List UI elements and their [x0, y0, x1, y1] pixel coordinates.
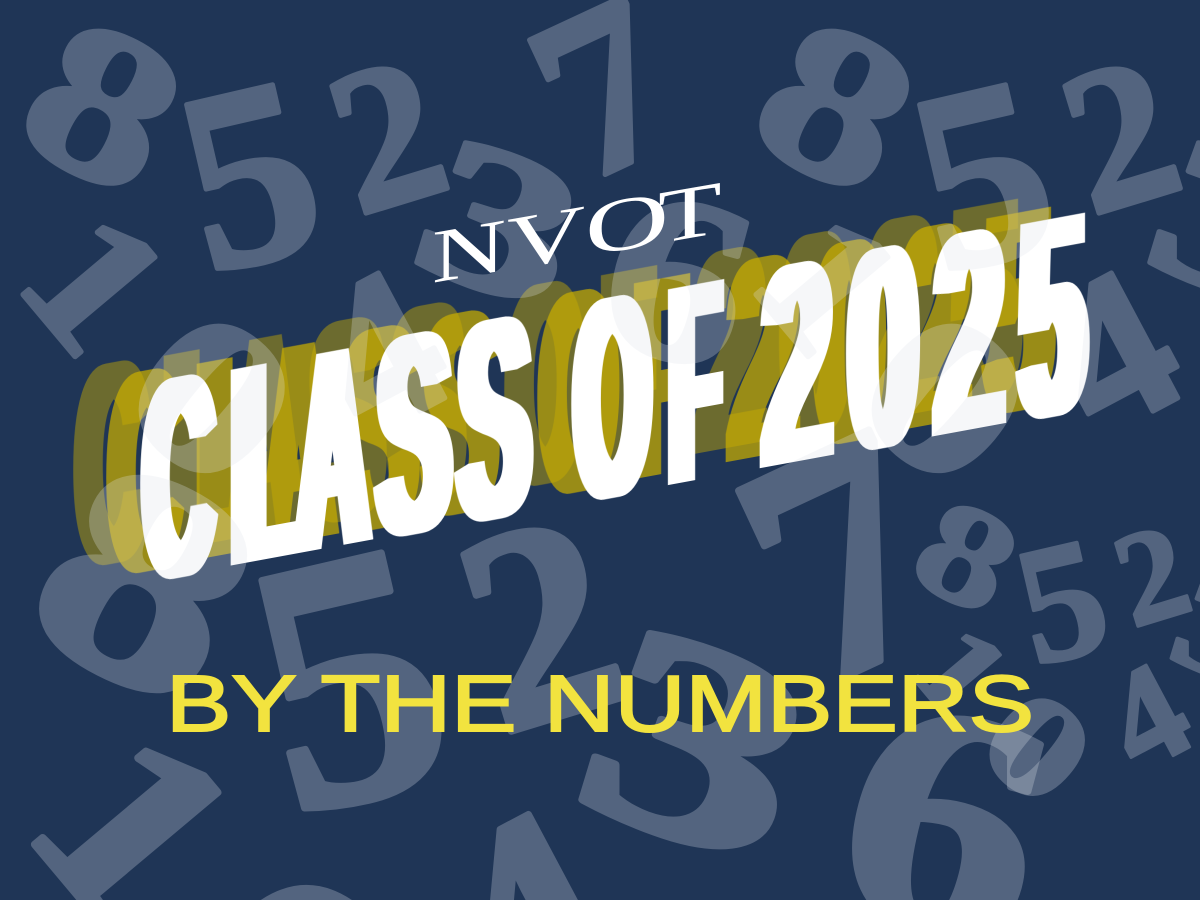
- title echo: olive shadow layer: C: [77, 299, 146, 627]
- title: CLASS OF 2025: S: [459, 255, 530, 584]
- title echo: olive shadow layer: F: [603, 206, 652, 531]
- title: CLASS OF 2025: C: [144, 313, 213, 641]
- title echo: gold shadow layer: 2: [729, 194, 797, 522]
- title echo: gold shadow layer: F: [636, 214, 685, 539]
- infographic poster: 5: [952, 139, 1018, 466]
- infographic poster: 5: [1019, 153, 1085, 480]
- title echo: olive shadow layer: 0: [782, 170, 850, 498]
- title: CLASS OF 2025: A: [297, 285, 368, 613]
- subtitle: BY THE NUMBERS: BY THE NUMBERS: [166, 659, 1034, 748]
- bottom large number group: 5: [217, 463, 482, 891]
- infographic poster: 5: [985, 147, 1051, 474]
- title echo: olive shadow layer: S: [392, 241, 463, 570]
- heading: NVOT: T: [658, 165, 722, 260]
- title echo: olive shadow layer: [77, 139, 1018, 627]
- heading: NVOT: O: [585, 174, 669, 273]
- title echo: gold shadow layer: 0: [815, 178, 883, 506]
- bottom large number group: 7: [689, 358, 997, 757]
- title echo: gold shadow layer: A: [263, 279, 334, 607]
- bottom large number group: [0, 358, 1087, 900]
- heading: NVOT: N: [432, 202, 506, 300]
- title echo: olive shadow layer: O: [508, 219, 583, 548]
- title echo: gold shadow layer: [110, 147, 1051, 635]
- top-right number group: 0: [814, 259, 1078, 535]
- right small number group: 1: [886, 600, 1037, 743]
- right small number group: 8: [890, 466, 1042, 646]
- title echo: olive shadow layer: S: [311, 256, 383, 584]
- top-left number group: 6: [576, 136, 780, 423]
- top-right number group: 5: [888, 20, 1078, 328]
- top-right number group: 2: [1038, 12, 1200, 259]
- bottom large number group: 2: [426, 450, 654, 794]
- title echo: gold shadow layer: S: [425, 249, 496, 578]
- heading: NVOT: V: [507, 189, 585, 287]
- heading: NVOT: [432, 165, 722, 300]
- top-left number group: 5: [155, 20, 345, 328]
- title: CLASS OF 2025: [144, 153, 1085, 641]
- top-left number group: 4: [276, 220, 483, 481]
- right small number group: [886, 466, 1200, 837]
- title: CLASS OF 2025: S: [378, 270, 450, 598]
- top-left number group: [0, 0, 780, 535]
- title: CLASS OF 2025: O: [575, 233, 650, 562]
- title: CLASS OF 2025: L: [229, 295, 315, 626]
- title: CLASS OF 2025: 2: [935, 168, 1003, 496]
- top-left number group: 2: [305, 12, 469, 259]
- top-right number group: 1: [713, 173, 944, 392]
- right small number group: 5: [1000, 501, 1124, 702]
- title echo: gold shadow layer: O: [541, 227, 616, 556]
- title echo: gold shadow layer: S: [344, 264, 416, 592]
- title: CLASS OF 2025: F: [670, 220, 719, 545]
- title: CLASS OF 2025: 0: [849, 184, 917, 512]
- title echo: gold shadow layer: L: [195, 289, 281, 620]
- title echo: gold shadow layer: C: [110, 307, 179, 635]
- title echo: gold shadow layer: 2: [901, 162, 969, 490]
- title echo: olive shadow layer: 2: [868, 154, 936, 482]
- right small number group: 0: [951, 656, 1124, 837]
- top-left number group: 3: [389, 89, 612, 355]
- top-right number group: [713, 0, 1200, 535]
- title echo: olive shadow layer: A: [230, 271, 301, 599]
- top-left number group: 0: [81, 259, 345, 535]
- title echo: olive shadow layer: L: [162, 281, 248, 612]
- title: CLASS OF 2025: 2: [763, 200, 831, 528]
- title echo: olive shadow layer: 2: [696, 186, 764, 514]
